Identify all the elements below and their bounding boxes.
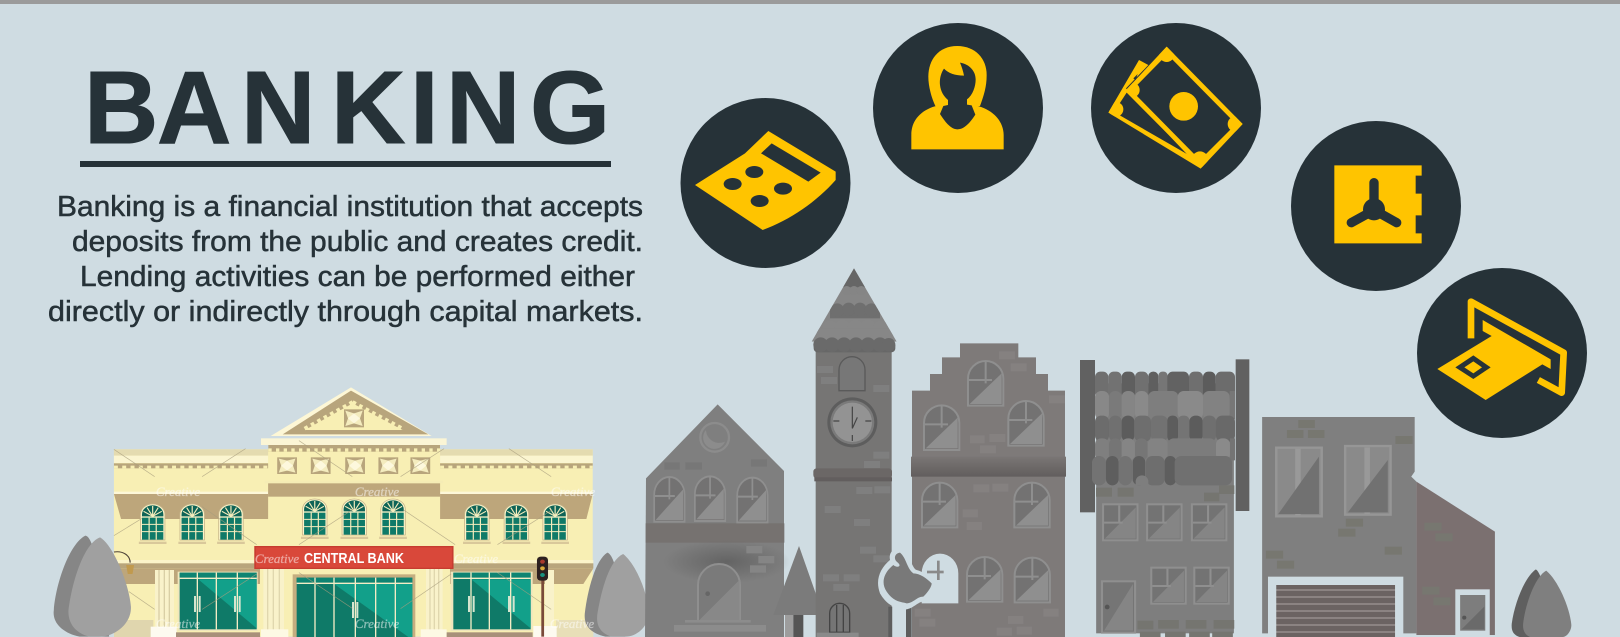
watermarks: Creative xyxy=(156,484,200,499)
icon: safe xyxy=(1291,121,1461,291)
upper windows xyxy=(1276,446,1391,516)
bank windows xyxy=(139,499,569,544)
street lamp xyxy=(114,552,134,574)
icon: calculator xyxy=(680,98,850,268)
grey buildings group A xyxy=(645,267,1066,637)
title underline xyxy=(80,161,611,167)
bank upper storeys xyxy=(114,449,593,637)
description text: Lending activities can be performed either xyxy=(80,261,635,293)
door: right xyxy=(447,572,533,637)
bank street furniture and trees xyxy=(54,441,649,637)
watermarks: Creative xyxy=(454,551,498,566)
door: left xyxy=(176,572,260,637)
icon: customer person xyxy=(873,23,1043,193)
stepped gable building xyxy=(911,343,1066,637)
door: centre xyxy=(293,574,415,637)
grey house xyxy=(645,404,790,637)
tree: right of bank xyxy=(585,553,649,637)
watermarks: Creative xyxy=(355,616,399,631)
bank sign board xyxy=(255,547,453,568)
clock xyxy=(827,397,877,447)
columns xyxy=(151,568,557,637)
description text: Banking is a financial institution that accepts xyxy=(57,191,643,223)
garage door xyxy=(1268,577,1403,637)
side door xyxy=(1455,589,1490,637)
bank ground floor xyxy=(114,560,593,637)
tree: far right xyxy=(1512,569,1571,637)
traffic light xyxy=(537,557,548,637)
bank pediment xyxy=(261,387,447,452)
tower roof xyxy=(810,267,898,343)
description text: deposits from the public and creates credit. xyxy=(72,226,643,258)
watermark lines xyxy=(114,441,552,609)
cut-out tree and window xyxy=(878,547,958,637)
top bar xyxy=(0,0,1620,4)
bank walls xyxy=(114,449,593,637)
watermarks: Creative xyxy=(551,484,595,499)
cornice band xyxy=(114,560,593,637)
townhouse tiled roof xyxy=(1080,359,1249,512)
description text xyxy=(48,191,643,328)
watermarks: Creative xyxy=(355,484,399,499)
description text: directly or indirectly through capital markets. xyxy=(48,296,643,328)
title: BANKING xyxy=(84,50,610,165)
watermarks: Creative xyxy=(156,616,200,631)
watermarks: Creative xyxy=(255,551,299,566)
tree: left of bank xyxy=(54,536,131,637)
tiled-roof townhouse xyxy=(1080,359,1249,637)
small tree xyxy=(773,546,823,637)
clock tower xyxy=(810,267,898,637)
watermarks xyxy=(156,484,595,631)
watermarks: Creative xyxy=(550,616,594,631)
icon: banknotes xyxy=(1091,23,1261,193)
sign label: CENTRAL BANK xyxy=(304,550,404,567)
bank ornaments xyxy=(277,457,430,474)
central bank building xyxy=(54,387,649,637)
townhouse body xyxy=(1096,383,1234,637)
grey buildings group B xyxy=(1262,417,1571,637)
icon: card in ATM xyxy=(1417,268,1587,438)
garage building xyxy=(1262,417,1495,637)
